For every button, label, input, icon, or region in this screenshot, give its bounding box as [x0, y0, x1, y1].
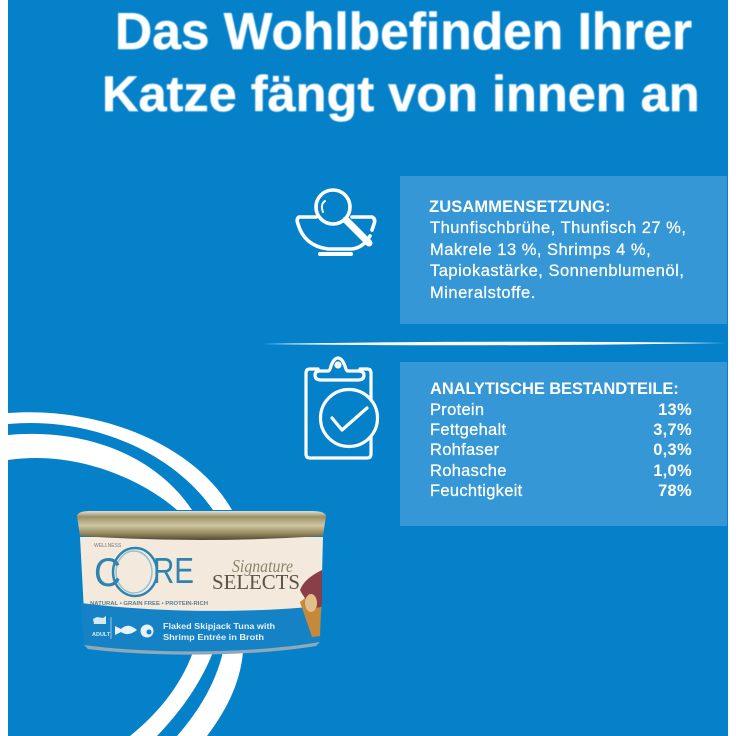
can lid	[77, 511, 326, 540]
product can: NATURAL • GRAIN FREE • PROTEIN-RICH	[90, 601, 208, 607]
CORE logo	[113, 548, 157, 596]
adult cat label: ADULT	[92, 632, 111, 638]
heading: Zusammensetzung: ZUSAMMENSETZUNG:	[429, 198, 611, 216]
table: nutrients: 13%	[658, 401, 692, 419]
table: nutrients: Feuchtigkeit	[430, 482, 523, 500]
ingredients text: Mineralstoffe.	[430, 284, 536, 302]
title	[102, 2, 700, 123]
table: nutrients: 78%	[658, 482, 692, 500]
table: nutrients: Fettgehalt	[430, 421, 506, 439]
table: nutrients: Protein	[430, 401, 484, 419]
ingredients text: Makrele 13 %, Shrimps 4 %,	[430, 241, 651, 259]
product can: RE	[153, 550, 194, 591]
icon: fish and shrimp	[115, 626, 137, 635]
product can: WELLNESS	[94, 543, 122, 549]
heading: Analytische Bestandteile: ANALYTISCHE BESTANDTEILE:	[430, 380, 679, 398]
table: nutrients	[430, 401, 692, 500]
flavour text: Flaked Skipjack Tuna with	[163, 621, 275, 631]
title: Katze fängt von innen an	[102, 65, 700, 122]
ingredients text	[430, 219, 686, 302]
panel: Analytische Bestandteile	[400, 362, 727, 526]
product can: Shrimp Entrée in Broth	[163, 632, 264, 642]
table: nutrients: Rohfaser	[430, 441, 499, 459]
can blue band	[81, 603, 321, 651]
can body cream label	[80, 537, 323, 612]
table: nutrients: 0,3%	[653, 441, 692, 459]
title: Das Wohlbefinden Ihrer	[115, 2, 692, 60]
food illustration	[300, 585, 322, 637]
table: nutrients: 3,7%	[653, 421, 692, 439]
table: nutrients: 1,0%	[653, 462, 692, 480]
product can: SELECTS	[212, 570, 300, 594]
table: nutrients: Rohasche	[430, 462, 507, 480]
ingredients text: Tapiokastärke, Sonnenblumenöl,	[430, 262, 684, 280]
panel: Zusammensetzung	[400, 176, 727, 324]
ingredients text: Thunfischbrühe, Thunfisch 27 %,	[430, 219, 686, 237]
product can: C	[94, 551, 121, 595]
Signature Selects: Signature	[232, 556, 293, 576]
